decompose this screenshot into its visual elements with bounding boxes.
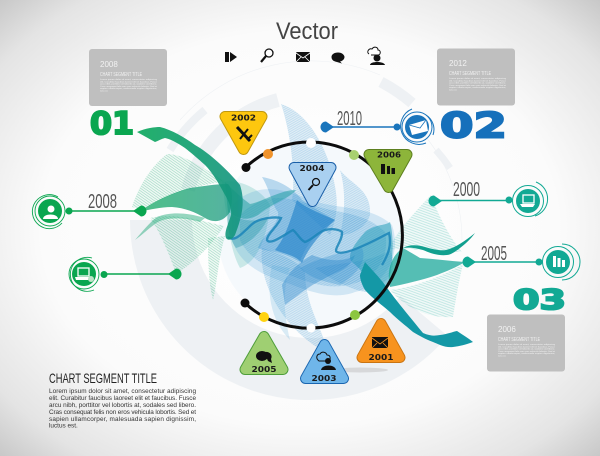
panel: 2012: arcu nibh, porttitor vel lobortis at, sodales sed libero. bbox=[449, 82, 507, 85]
panel: 2008: Lorem ipsum dolor sit amet, consectetur adipiscing bbox=[100, 78, 157, 81]
panel: 2012: 2012 bbox=[449, 59, 467, 68]
triangle: 2002: 2002 bbox=[231, 114, 256, 122]
triangle: 2006 bbox=[369, 150, 407, 188]
node: laptop bbox=[69, 257, 182, 291]
wave: left green ribbon bbox=[137, 127, 243, 240]
wave: left green wing bbox=[141, 184, 232, 221]
triangle: 2005 bbox=[245, 336, 283, 374]
wave: central mass wash bbox=[232, 189, 395, 295]
icon: play bbox=[225, 52, 237, 62]
wave: right teal mesh bbox=[388, 195, 462, 252]
text block: chart segment title: arcu nibh, porttitor vel lobortis at, sodales sed libero. bbox=[49, 402, 196, 409]
triangle: 2004 bbox=[294, 164, 331, 202]
panel: 2006: sapien ullamcorper, malesuada sapien dignissim, bbox=[498, 353, 556, 355]
triangle: 2002 bbox=[225, 114, 262, 150]
panel: 2012: sapien ullamcorper, malesuada sapien dignissim, bbox=[449, 87, 507, 89]
wave: right teal spike bbox=[403, 233, 475, 255]
triangle: 2004: 2004 bbox=[300, 164, 325, 173]
node: 2008 person: 2008 bbox=[88, 191, 117, 213]
number 02: 02 bbox=[440, 106, 507, 146]
panel: 2012: luctus est. bbox=[449, 88, 458, 92]
panel: 2008: 2008 bbox=[100, 60, 118, 69]
panel: 2008 bbox=[89, 49, 167, 106]
panel: 2008: Cras consequat felis non eros vehicula lobortis. Sed et bbox=[100, 85, 158, 88]
wave: left lower spike bbox=[135, 213, 205, 240]
node: 2010 envelope: 2010 bbox=[337, 108, 362, 130]
icon: person with cloud bbox=[368, 47, 385, 65]
text block: chart segment title: luctus est. bbox=[49, 422, 78, 430]
text block: chart segment title: Cras consequat felis non eros vehicula lobortis. Sed et bbox=[49, 409, 196, 416]
icon: speech bubble bbox=[332, 52, 344, 64]
wave: right teal ribbon bbox=[360, 262, 473, 347]
triangle: 2001 bbox=[362, 324, 400, 362]
text block: chart segment title: Lorem ipsum dolor sit amet, consectetur adipiscing bbox=[49, 388, 196, 395]
panel: 2008: elit. Curabitur faucibus laoreet elit et faucibus. Fusce bbox=[100, 80, 157, 83]
icon: magnifier bbox=[261, 49, 273, 62]
node: 2005 chart: 2005 bbox=[481, 243, 507, 265]
wave: central mass mesh bbox=[240, 198, 386, 286]
panel: 2012: elit. Curabitur faucibus laoreet elit et faucibus. Fusce bbox=[449, 79, 506, 82]
triangle: 2001: 2001 bbox=[368, 353, 394, 362]
panel: 2006: Lorem ipsum dolor sit amet, consectetur adipiscing bbox=[498, 343, 555, 346]
icon: envelope bbox=[296, 52, 310, 62]
pale disc inside ring bbox=[218, 143, 402, 327]
panel: 2008: arcu nibh, porttitor vel lobortis at, sodales sed libero. bbox=[100, 83, 158, 86]
wave: dark blue star bbox=[275, 200, 335, 263]
triangle: 2003 bbox=[306, 344, 344, 383]
text block: chart segment title: sapien ullamcorper, malesuada sapien dignissim, bbox=[49, 416, 196, 423]
panel: 2006: Cras consequat felis non eros vehicula lobortis. Sed et bbox=[498, 350, 556, 353]
panel: 2006: CHART SEGMENT TITLE bbox=[498, 337, 540, 343]
wave: lower dark blue band bbox=[282, 255, 355, 305]
wave: right teal band bbox=[350, 222, 393, 300]
node: 2010 envelope bbox=[320, 108, 434, 144]
wave: right teal wing bbox=[389, 248, 465, 287]
wave: lower blue plume bbox=[262, 248, 326, 352]
panel: 2006: 2006 bbox=[498, 325, 516, 334]
panel: 2006: arcu nibh, porttitor vel lobortis at, sodales sed libero. bbox=[498, 348, 556, 351]
wave: left teal fold bbox=[227, 212, 268, 248]
panel: 2008: luctus est. bbox=[100, 90, 109, 92]
panel: 2012: Lorem ipsum dolor sit amet, consectetur adipiscing bbox=[449, 77, 506, 80]
wave: teal upper band bbox=[225, 182, 296, 219]
central wave artwork bbox=[132, 104, 475, 352]
number 03: 03 bbox=[513, 283, 566, 316]
title: Vector bbox=[276, 18, 338, 45]
node: 2000 laptop: 2000 bbox=[453, 179, 480, 201]
triangle: 2006: 2006 bbox=[377, 150, 401, 160]
wave: left green mesh bbox=[132, 154, 225, 210]
triangle: 2005: 2005 bbox=[252, 365, 277, 374]
panel: 2006: luctus est. bbox=[498, 354, 507, 358]
black ring timeline bbox=[240, 138, 402, 332]
node: 2008 person bbox=[32, 191, 146, 229]
wave: pale teal wash bbox=[222, 181, 270, 268]
wave: upper blue mesh bbox=[281, 104, 337, 235]
panel: 2012 bbox=[437, 48, 515, 106]
wave: zigzag line bbox=[228, 217, 390, 265]
triangle shadow bbox=[332, 368, 388, 372]
triangle: 2003: 2003 bbox=[312, 374, 336, 383]
panel: 2008: CHART SEGMENT TITLE bbox=[100, 72, 142, 78]
wave: pale lower bands bbox=[300, 248, 363, 285]
panel: 2008: sapien ullamcorper, malesuada sapien dignissim, bbox=[100, 88, 158, 90]
wave: lower left mesh bbox=[150, 216, 224, 274]
text block: chart segment title bbox=[49, 370, 196, 430]
text block: chart segment title: CHART SEGMENT TITLE bbox=[49, 370, 157, 386]
node: 2000 laptop bbox=[429, 179, 548, 216]
text block: chart segment title: elit. Curabitur faucibus laoreet elit et faucibus. Fusce bbox=[49, 395, 196, 402]
panel: 2012: Cras consequat felis non eros vehicula lobortis. Sed et bbox=[449, 84, 507, 87]
number 01: 01 bbox=[90, 106, 134, 142]
wave: blue upper band bbox=[258, 177, 335, 262]
panel: 2006: elit. Curabitur faucibus laoreet elit et faucibus. Fusce bbox=[498, 345, 555, 348]
background rings bbox=[161, 61, 462, 369]
icon row bbox=[225, 47, 385, 65]
panel: 2006 bbox=[487, 314, 565, 372]
panel: 2012: CHART SEGMENT TITLE bbox=[449, 71, 491, 77]
node: 2005 chart bbox=[462, 243, 580, 280]
